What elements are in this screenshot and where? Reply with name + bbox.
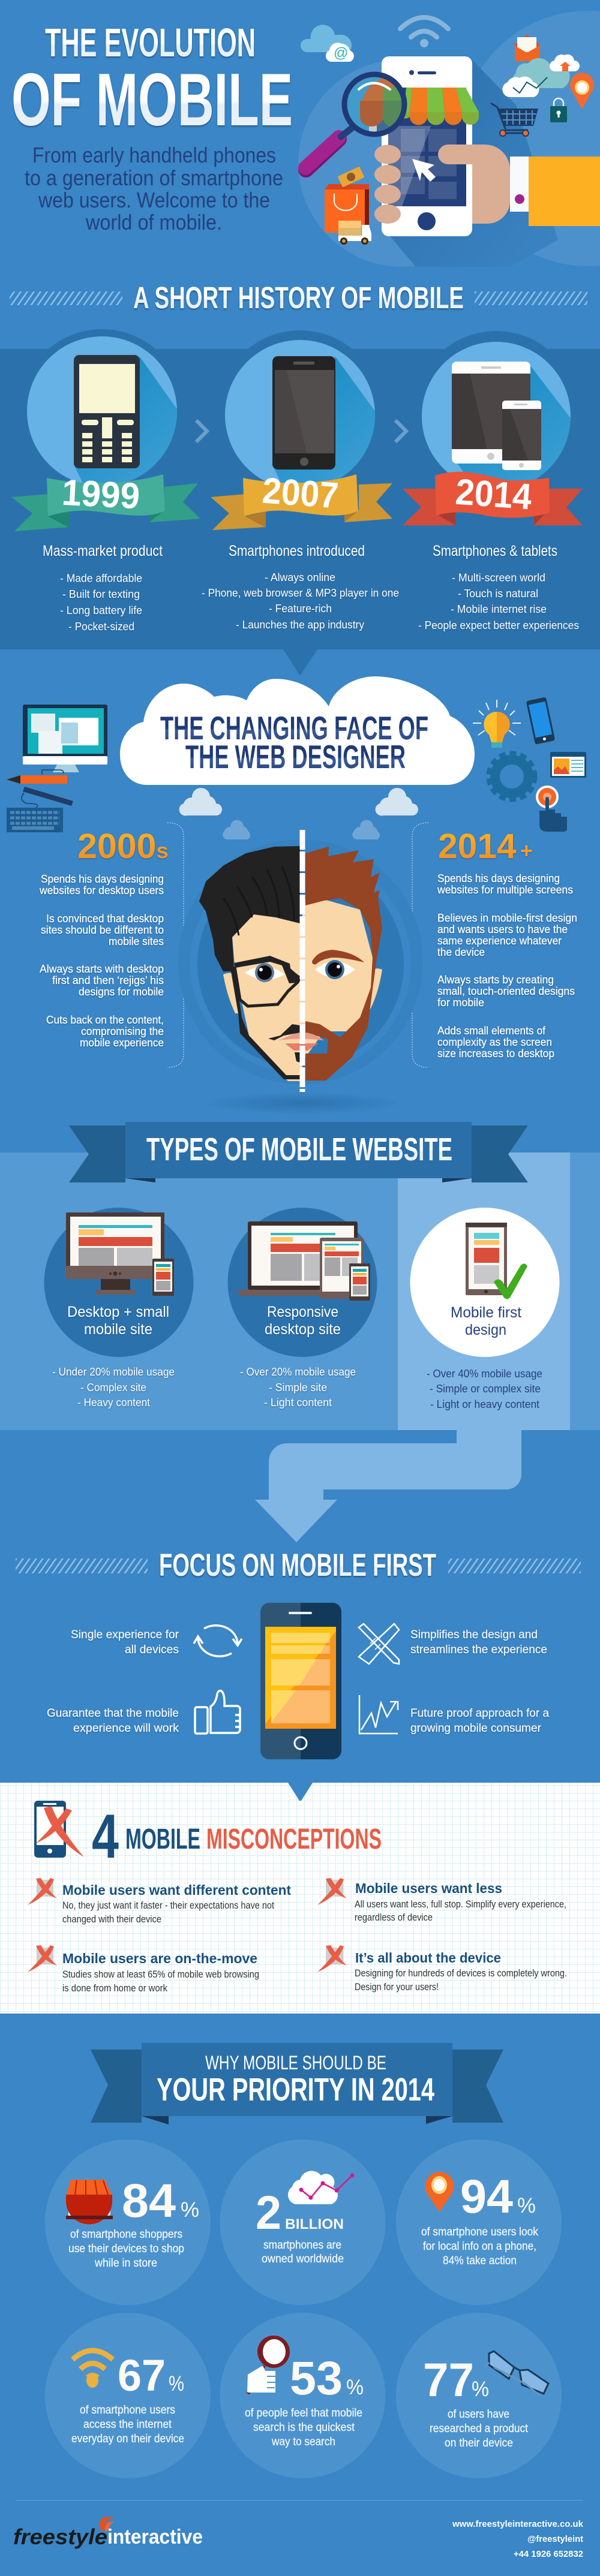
intro text: From early handheld phones: [32, 143, 276, 167]
icon: location pin: [570, 73, 594, 109]
cloud heading: THE WEB DESIGNER: [185, 738, 406, 775]
stat: 94 percent: [396, 2139, 562, 2305]
text: 2014 details: - Mobile internet rise: [451, 603, 547, 615]
text: guarantee: Guarantee that the mobile: [47, 1707, 179, 1720]
cloud heading: [120, 676, 475, 785]
icon: touch hand: [536, 786, 567, 832]
arrow: to focus on mobile first: [255, 1430, 521, 1542]
text: 2014 plus column: complexity as the screen: [437, 1036, 552, 1048]
text: future proof: [410, 1707, 549, 1735]
caption: 84% take action: [443, 2255, 517, 2267]
caption: of smartphone users: [80, 2404, 175, 2416]
icon: storefront: [66, 2180, 113, 2225]
icon: wifi: [400, 17, 448, 47]
text: 1999 details: Mass-market product: [43, 543, 163, 559]
bullets: desktop column: - Under 20% mobile usage: [52, 1365, 175, 1378]
text: 2000s column: designs for mobile: [79, 986, 164, 998]
text: 2000s column: mobile experience: [80, 1037, 164, 1049]
icon: clouds with at sign: @: [334, 45, 348, 61]
caption: [430, 2408, 529, 2449]
misconception: about the device: [317, 1945, 567, 1993]
icon: gold wifi: [73, 2351, 113, 2388]
caption: [245, 2407, 362, 2448]
text: future proof: Future proof approach for a: [410, 1707, 549, 1720]
label: Responsive: [267, 1304, 338, 1320]
bullets: responsive column: - Over 20% mobile usage: [240, 1365, 356, 1378]
misconception: different content: [28, 1878, 291, 1925]
text: single experience: [71, 1629, 179, 1656]
text: simplifies: [410, 1629, 547, 1656]
stat: 2 billion: BILLION: [285, 2216, 344, 2232]
caption: of users have: [448, 2408, 509, 2421]
text: 1999 details: [43, 543, 163, 633]
icon: cloud with pink chart: [288, 2171, 354, 2204]
caption: researched a product: [430, 2422, 529, 2435]
stat: 2 billion: [220, 2139, 385, 2305]
icon: crossed out phone: [34, 1801, 84, 1858]
text: 2014 plus column: the device: [437, 946, 485, 958]
text: 1999 details: - Made affordable: [60, 572, 142, 584]
text: guarantee: [47, 1707, 179, 1735]
panel: history timeline: [0, 329, 600, 676]
text: 2007 details: - Launches the app industry: [236, 618, 365, 631]
label: Mobile first: [451, 1304, 521, 1321]
misconception: about the device: Design for your users!: [355, 1981, 439, 1993]
icon: desktop monitor: [23, 705, 107, 772]
column: 1999 phone: [27, 336, 177, 483]
text: guarantee: experience will work: [73, 1722, 179, 1735]
icon: padlock: [550, 98, 567, 122]
text: 2000s column: [39, 827, 169, 1049]
stat: 84 percent: %: [181, 2198, 199, 2222]
caption: of smartphone shoppers: [70, 2228, 182, 2241]
icon: shopping bag and money: [325, 166, 369, 233]
icon: refresh arrows: [194, 1626, 242, 1656]
stat: 53 percent: %: [346, 2376, 364, 2399]
caption: [68, 2228, 184, 2270]
text: 2014 plus column: websites for multiple screens: [437, 884, 573, 896]
label: [451, 1304, 521, 1338]
misconception: want less: regardless of device: [355, 1912, 433, 1923]
illustration: hand holding phone: [298, 11, 600, 267]
misconception: different content: No, they just want it faster - their expectations have not: [62, 1900, 274, 1911]
panel: 4 mobile misconceptions: [0, 1783, 600, 2014]
illustration: phone with wireframe: [260, 1603, 341, 1759]
text: 2000s column: Always starts with desktop: [40, 963, 164, 975]
icon: glasses: [485, 2351, 548, 2396]
text: 2007 details: [202, 543, 399, 631]
icon: location pin: [425, 2172, 454, 2212]
panel: hero: [11, 11, 600, 267]
caption: of people feel that mobile: [245, 2407, 362, 2419]
text: 2000s column: mobile sites: [109, 935, 164, 947]
caption: for local info on a phone,: [423, 2240, 536, 2253]
text: 2014 details: [418, 543, 579, 631]
misconception: about the device: Designing for hundreds of devices is completely wrong.: [355, 1967, 567, 1979]
bullets: mobile first column: - Light or heavy content: [430, 1398, 539, 1410]
ribbon: 1999: 1999: [61, 472, 141, 516]
ribbon heading: why mobile should be your priority: YOUR PRIORITY IN 2014: [157, 2072, 434, 2108]
stat: 2 billion: 2: [256, 2186, 281, 2239]
cloud heading: THE CHANGING FACE OF: [160, 709, 428, 747]
text: 2000s column: Cuts back on the content,: [46, 1014, 164, 1026]
misconception: on the move: is done from home or work: [62, 1982, 167, 1994]
logo: freestyle interactive: freestyle: [13, 2524, 107, 2549]
misconception: different content: Mobile users want different content: [62, 1882, 291, 1898]
icon: hand with magnifier: [247, 2336, 290, 2394]
title: THE EVOLUTION: [45, 20, 256, 65]
contact details: www.freestyleinteractive.co.uk: [452, 2519, 584, 2529]
text: simplifies: Simplifies the design and: [410, 1629, 538, 1641]
contact details: @freestyleint: [527, 2534, 583, 2544]
label: Desktop + small: [67, 1304, 169, 1320]
illustration: split face: [178, 830, 423, 1114]
stat: 84 percent: [45, 2139, 211, 2305]
ribbon heading: [69, 1122, 528, 1182]
caption: everyday on their device: [71, 2433, 184, 2445]
caption: smartphones are: [263, 2239, 341, 2252]
title: OF MOBILE: [11, 59, 293, 142]
bullets: responsive column: - Light content: [264, 1396, 332, 1409]
icon: envelope: [515, 35, 539, 61]
text: 2014 details: - People expect better experiences: [418, 619, 579, 631]
text: 1999 details: - Built for texting: [62, 588, 140, 600]
bullets: responsive column: [240, 1365, 356, 1409]
arrow: [395, 420, 406, 442]
icon: gear: [488, 753, 535, 800]
heading: a short history of mobile: A SHORT HISTORY OF MOBILE: [133, 281, 464, 315]
label: design: [465, 1322, 506, 1338]
text: 2014 plus column: 2014+: [438, 827, 533, 866]
ribbon: 2014: [403, 471, 583, 525]
bullets: mobile first column: - Over 40% mobile usage: [427, 1367, 542, 1380]
label: desktop site: [265, 1321, 341, 1338]
stat: 53 percent: [220, 2313, 385, 2478]
bullets: responsive column: - Simple site: [269, 1381, 327, 1394]
stat: 67 percent: %: [169, 2372, 184, 2396]
text: 2000s column: sites should be different to: [41, 924, 164, 936]
misconception: different content: changed with their device: [62, 1913, 161, 1925]
panel: focus on mobile first: [47, 1603, 549, 1759]
stat: 84 percent: 84: [122, 2174, 176, 2227]
icon: pen pencil and keyboard: [7, 770, 73, 832]
misconception: want less: All users want less, full stop. Simplify every experience,: [355, 1898, 566, 1910]
heading: 4 mobile misconceptions: [92, 1802, 382, 1871]
text: 2014 plus column: small, touch-oriented designs: [437, 985, 575, 997]
intro text: to a generation of smartphone: [25, 165, 283, 190]
panel: changing face of the web designer: [7, 676, 586, 1114]
icon: shopping cart: [491, 103, 538, 136]
text: 1999 details: - Long battery life: [60, 604, 142, 616]
caption: of smartphone users look: [421, 2226, 538, 2238]
caption: [421, 2226, 538, 2267]
stat: 94 percent: 94: [460, 2169, 513, 2223]
text: 2007 details: - Always online: [265, 571, 335, 583]
icon: browser chart window: [550, 752, 586, 778]
caption: way to search: [271, 2436, 335, 2448]
text: 2014 plus column: Spends his days designing: [437, 872, 560, 884]
text: 2000s column: compromising the: [81, 1025, 164, 1037]
caption: while in store: [94, 2257, 157, 2270]
logo: freestyle interactive: interactive: [107, 2526, 203, 2548]
heading: 4 mobile misconceptions: MOBILE: [125, 1823, 200, 1855]
stat: 77 percent: [396, 2313, 562, 2478]
text: 2014 plus column: Always starts by creating: [437, 974, 554, 986]
text: 2000s column: Spends his days designing: [41, 873, 164, 885]
text: 2000s column: websites for desktop users: [39, 884, 164, 896]
column: mobile first design: [410, 1208, 559, 1357]
column: responsive desktop site: [228, 1208, 377, 1357]
heading: focus on mobile first: FOCUS ON MOBILE FIRST: [159, 1548, 436, 1583]
stat: 67 percent: [45, 2313, 211, 2478]
intro text: web users. Welcome to the: [38, 188, 270, 212]
ribbon heading: why mobile should be your priority: [91, 2043, 503, 2124]
column: 2014 tablet and phone: [422, 342, 571, 481]
ribbon: 1999: [11, 472, 200, 531]
icon: growth chart: [359, 1695, 398, 1734]
text: 2014 plus column: and wants users to have the: [437, 923, 568, 935]
text: 2000s column: 2000s: [77, 827, 169, 866]
text: 2014 plus column: Adds small elements of: [437, 1025, 546, 1037]
contact details: +44 1926 652832: [514, 2549, 583, 2559]
text: 2014 plus column: [437, 827, 577, 1060]
arrow: [196, 420, 207, 442]
dotted braces: [167, 823, 428, 1067]
stat: 94 percent: %: [517, 2194, 536, 2217]
misconception: want less: Mobile users want less: [355, 1880, 502, 1896]
bullets: mobile first column: [427, 1367, 542, 1410]
text: simplifies: streamlines the experience: [410, 1644, 547, 1656]
caption: [71, 2404, 184, 2445]
icon: delivery truck: [338, 221, 371, 245]
text: 2014 plus column: size increases to desktop: [437, 1048, 554, 1060]
stat: 67 percent: 67: [118, 2351, 166, 2400]
caption: search is the quickest: [253, 2421, 355, 2434]
text: 2007 details: Smartphones introduced: [229, 543, 365, 559]
stat: 53 percent: 53: [290, 2351, 343, 2405]
contact details: [452, 2519, 584, 2559]
text: 2014 details: - Touch is natural: [458, 587, 538, 600]
caption: use their devices to shop: [68, 2243, 184, 2255]
text: 2014 plus column: Believes in mobile-first design: [437, 912, 577, 924]
label: [265, 1304, 341, 1338]
stat: 77 percent: %: [472, 2378, 489, 2401]
misconception: want less: [317, 1878, 566, 1923]
misconception: on the move: Mobile users are on-the-move: [62, 1951, 257, 1966]
heading: 4 mobile misconceptions: MISCONCEPTIONS: [206, 1823, 382, 1855]
icon: clouds with at sign: [301, 25, 354, 62]
text: single experience: Single experience for: [71, 1629, 179, 1641]
text: 2000s column: first and then ‘rejigs’ his: [52, 974, 164, 986]
text: 2014 details: - Multi-screen world: [452, 571, 545, 584]
ribbon: 2014: 2014: [454, 471, 533, 517]
text: 2014 plus column: for mobile: [437, 997, 484, 1009]
ribbon heading: TYPES OF MOBILE WEBSITE: [146, 1131, 452, 1167]
panel: types of mobile website: [0, 1122, 600, 1430]
caption: on their device: [445, 2437, 513, 2449]
misconception: on the move: Studies show at least 65% of mobile web browsing: [62, 1969, 259, 1980]
stat: 77 percent: 77: [423, 2353, 474, 2406]
icon: thumbs up: [195, 1691, 241, 1734]
icon: web clouds: [502, 55, 580, 97]
column: desktop plus small mobile site: [44, 1208, 193, 1357]
text: 2014 details: Smartphones & tablets: [433, 543, 557, 559]
label: [67, 1304, 169, 1338]
column: 2007 smartphone: [225, 340, 375, 483]
icon: pencil and ruler: [359, 1624, 399, 1664]
text: 2007 details: - Feature-rich: [269, 602, 332, 615]
bullets: desktop column: [52, 1365, 175, 1409]
logo: freestyle interactive: [13, 2517, 203, 2549]
text: future proof: growing mobile consumer: [410, 1722, 542, 1735]
ribbon: 2007: 2007: [261, 470, 340, 516]
text: 1999 details: - Pocket-sized: [68, 620, 134, 633]
bullets: desktop column: - Heavy content: [77, 1396, 150, 1409]
misconception: about the device: It’s all about the device: [355, 1950, 501, 1966]
icon: tilted smartphone: [526, 697, 555, 745]
text: 2007 details: - Phone, web browser & MP3 player in one: [202, 586, 399, 599]
bullets: desktop column: - Complex site: [80, 1381, 146, 1394]
label: mobile site: [84, 1321, 152, 1338]
intro text: [25, 143, 283, 234]
text: 2000s column: Is convinced that desktop: [46, 913, 164, 925]
caption: [262, 2239, 344, 2265]
bullets: mobile first column: - Simple or complex site: [430, 1382, 541, 1395]
text: single experience: all devices: [125, 1644, 179, 1656]
intro text: world of mobile.: [85, 210, 222, 234]
heading: 4 mobile misconceptions: 4: [92, 1802, 119, 1871]
caption: access the internet: [83, 2418, 172, 2431]
text: 2014 plus column: same experience whatever: [437, 935, 562, 947]
title: [11, 20, 293, 142]
caption: owned worldwide: [262, 2253, 344, 2265]
icon: light bulb: [473, 700, 521, 748]
small clouds: [179, 788, 418, 839]
ribbon: 2007: [211, 470, 392, 530]
ribbon heading: why mobile should be your priority: WHY MOBILE SHOULD BE: [205, 2052, 386, 2074]
misconception: on the move: [28, 1945, 259, 1994]
